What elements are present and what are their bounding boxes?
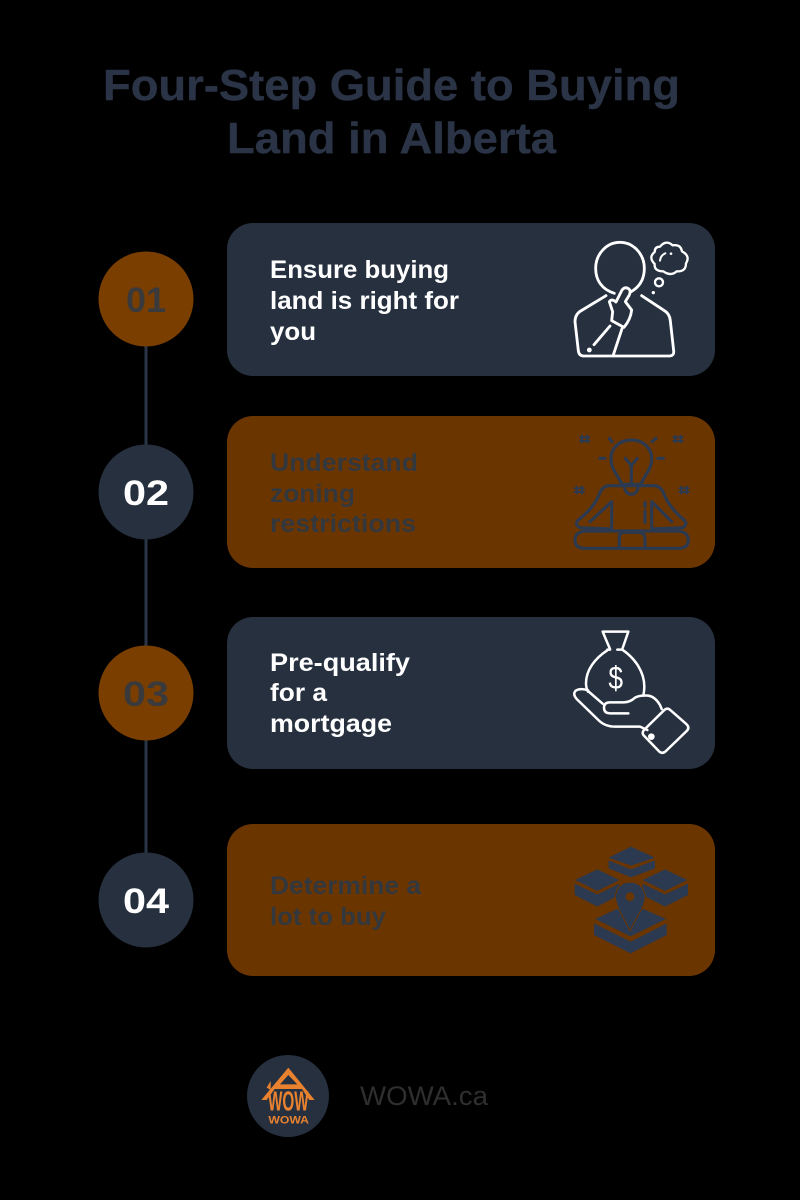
step 4 text — [270, 872, 422, 931]
step 01 marker — [98, 252, 194, 346]
icon: land plots with location pin — [575, 847, 688, 953]
title — [103, 61, 680, 163]
icon: WOWA house logo — [261, 1068, 315, 1126]
step 4 text: lot to buy — [270, 903, 386, 931]
panel: step 3 — [227, 617, 715, 769]
step 04 marker — [98, 852, 194, 948]
step 3 text — [270, 649, 410, 738]
panel: step 4 — [227, 824, 715, 976]
step 3 text: for a — [270, 679, 328, 707]
icon: meditating person with light bulb — [575, 436, 689, 548]
brand name: WOWA.ca — [360, 1081, 489, 1111]
title: Land in Alberta — [227, 114, 557, 163]
step 1 text — [270, 256, 459, 346]
icon: hand holding money bag: $ — [608, 659, 623, 696]
step 02 marker — [98, 444, 194, 540]
step 2 text: restrictions — [270, 510, 416, 538]
step 3 text: Pre-qualify — [270, 649, 410, 677]
timeline connector — [144, 340, 148, 860]
step 2 text: zoning — [270, 480, 355, 508]
panel: step 2 — [227, 416, 715, 568]
icon: WOWA house logo: WOWA — [268, 1114, 309, 1126]
step 2 text — [270, 449, 418, 538]
icon: person thinking — [575, 242, 688, 356]
step 4 text: Determine a — [270, 872, 422, 900]
step 2 text: Understand — [270, 449, 418, 477]
step 03 marker: 03 — [123, 675, 169, 714]
step 02 marker: 02 — [123, 474, 169, 513]
step 01 marker: 01 — [126, 281, 166, 320]
title: Four-Step Guide to Buying — [103, 61, 680, 110]
icon: WOWA house logo: WOW — [268, 1086, 309, 1117]
step 03 marker — [98, 646, 194, 740]
step 1 text: you — [270, 318, 316, 346]
step 1 text: land is right for — [270, 287, 459, 315]
panel: step 1 — [227, 223, 715, 376]
step 04 marker: 04 — [123, 882, 170, 921]
step 1 text: Ensure buying — [270, 256, 449, 284]
logo badge — [247, 1055, 329, 1137]
icon: hand holding money bag — [574, 632, 688, 753]
step 3 text: mortgage — [270, 710, 392, 738]
